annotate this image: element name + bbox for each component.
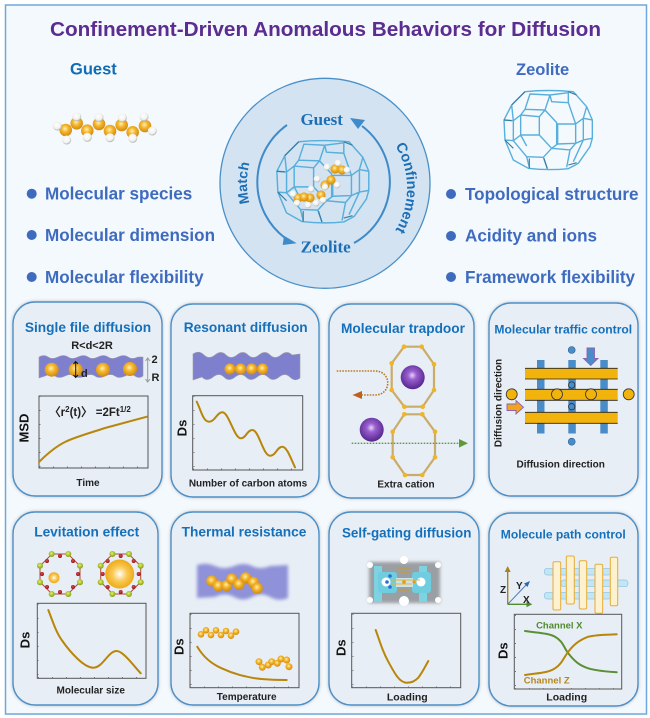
- label: channel X: Channel X: [536, 620, 583, 631]
- list: guest properties: Molecular flexibility: [45, 268, 204, 287]
- upper ring with cation: [389, 344, 436, 409]
- list: zeolite properties: Acidity and ions: [465, 226, 597, 246]
- panel: levitation effect: [13, 512, 158, 705]
- label: Match: Match: [238, 162, 250, 204]
- Ds chart: [37, 603, 146, 678]
- heading: Single file diffusion: [25, 320, 151, 335]
- arrow: confinement: [350, 118, 390, 243]
- title: Confinement-Driven Anomalous Behaviors for Diffusion: [50, 19, 601, 41]
- arrow: open path: [352, 439, 468, 448]
- panel: molecular traffic control: [489, 303, 638, 496]
- panel: molecular trapdoor: [329, 304, 474, 498]
- heading: Molecular trapdoor: [341, 321, 466, 336]
- panel: molecule path control: [489, 513, 638, 706]
- label: Zeolite: Zeolite: [301, 238, 351, 257]
- heading: Molecule path control: [501, 527, 626, 541]
- channel with molecules: 2: [152, 354, 158, 366]
- MSD chart: 1/2: [120, 405, 131, 414]
- icon: zeolite cage: [504, 90, 592, 170]
- axis: Ds: Ds: [174, 420, 190, 436]
- list: guest properties: [27, 184, 215, 287]
- arrow: blue down: [584, 348, 598, 366]
- channel with molecules: [193, 352, 300, 380]
- curve: channel X: [525, 631, 617, 672]
- channel with molecules: R: [152, 372, 160, 384]
- axis: loading: Loading: [546, 692, 587, 704]
- channel with molecules: [39, 354, 160, 384]
- panel: single file diffusion: [13, 302, 162, 496]
- channel grid: [506, 346, 634, 445]
- heading: Guest: Guest: [70, 61, 117, 79]
- MSD chart: (t)〉 =2Ft: [70, 405, 120, 419]
- coordinate axes: Z: [500, 585, 506, 596]
- icon: guest molecule: [53, 112, 157, 144]
- label: Confinement: Confinement: [396, 142, 417, 234]
- panel: thermal resistance: [171, 512, 319, 705]
- label: Extra cation: [377, 480, 435, 491]
- Ds chart: [193, 396, 303, 470]
- list: zeolite properties: [446, 185, 638, 287]
- axis: Ds: Ds: [18, 632, 32, 648]
- central circle diagram: [219, 78, 431, 289]
- condition label: R<d<2R: [71, 340, 113, 352]
- heading: Molecular traffic control: [494, 323, 632, 337]
- label: channel Z: Channel Z: [524, 675, 570, 686]
- label: horizontal direction: Diffusion direction: [517, 460, 605, 471]
- heading: Levitation effect: [34, 525, 140, 540]
- ring small molecule: [37, 551, 83, 597]
- heading: Self-gating diffusion: [342, 526, 471, 541]
- MSD chart: 〈r: [49, 407, 65, 419]
- axis: Ds: Ds: [172, 638, 186, 655]
- axis: MSD: MSD: [16, 414, 32, 442]
- label: vertical direction: Diffusion direction: [494, 359, 504, 447]
- heading: Zeolite: Zeolite: [516, 61, 569, 79]
- MSD chart: 2: [65, 405, 70, 414]
- heading: Resonant diffusion: [184, 320, 308, 335]
- axis: Ds: Ds: [334, 639, 348, 656]
- coordinate axes: Y: [516, 581, 523, 592]
- axis: Ds: Ds: [496, 642, 510, 659]
- icon: cage with molecule: [277, 141, 369, 223]
- axis: loading: Loading: [387, 692, 428, 704]
- list: zeolite properties: Framework flexibility: [465, 268, 636, 287]
- coordinate axes: [500, 566, 532, 607]
- lower ring: [390, 412, 437, 477]
- channel with molecules: d: [81, 368, 88, 380]
- ring large molecule: [98, 551, 144, 597]
- heading: Thermal resistance: [182, 525, 307, 540]
- list: zeolite properties: Topological structure: [465, 185, 638, 204]
- axis: molecular size: Molecular size: [57, 685, 125, 696]
- arrow: orange right: [507, 400, 524, 414]
- axis: Time: Time: [76, 478, 100, 489]
- Ds chart: [190, 613, 299, 688]
- channel with flexible molecule: [197, 564, 288, 600]
- list: guest properties: Molecular species: [45, 184, 192, 204]
- MSD chart: [39, 396, 148, 468]
- coordinate axes: X: [523, 595, 530, 606]
- axis: number of carbon atoms: Number of carbon atoms: [189, 479, 308, 490]
- arrow: blocked path: [337, 371, 388, 399]
- crossing channels: [544, 556, 628, 613]
- label: Guest: Guest: [300, 110, 343, 129]
- arrow: match: [257, 125, 297, 245]
- axis: temperature: Temperature: [217, 692, 277, 703]
- cation outside ring: [360, 418, 384, 442]
- list: guest properties: Molecular dimension: [45, 226, 215, 245]
- Ds chart: [514, 614, 622, 689]
- framework illustration: [367, 556, 441, 606]
- panel: self-gating diffusion: [329, 512, 479, 705]
- curve: channel Z: [525, 634, 617, 675]
- panel: resonant diffusion: [171, 304, 319, 497]
- Ds chart: [352, 613, 461, 688]
